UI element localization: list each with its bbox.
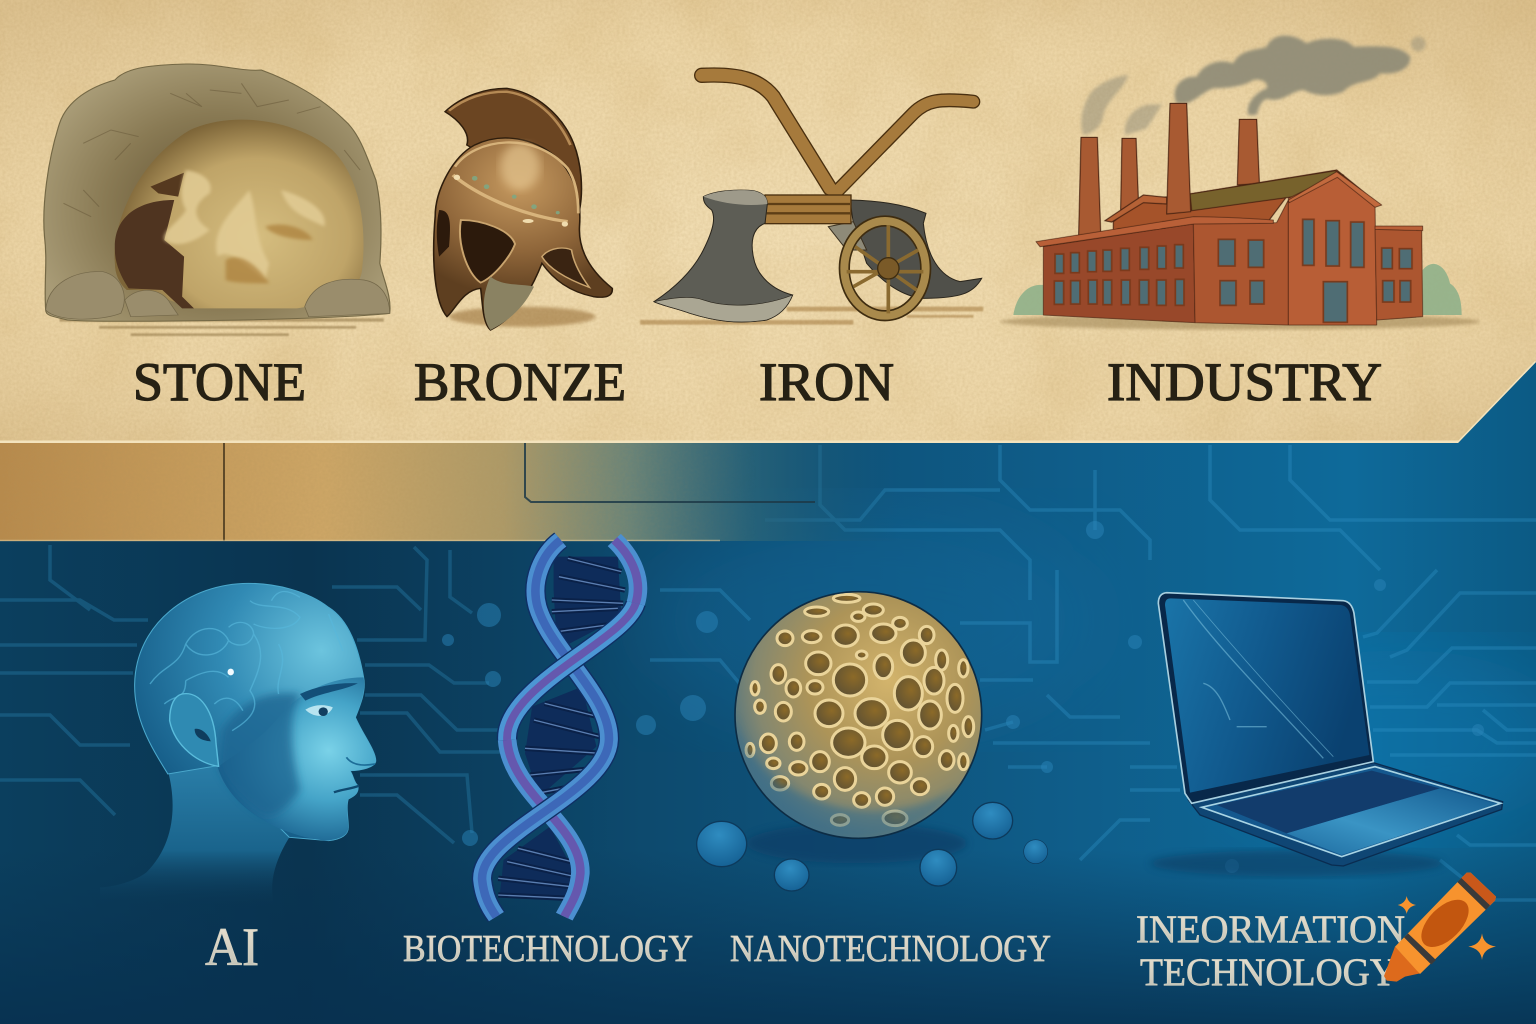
darker circuit traces behind the head [0, 545, 504, 843]
icon: stone cave [44, 64, 390, 336]
base pair rungs [498, 558, 625, 898]
keyboard [1217, 771, 1440, 833]
cranium [135, 583, 376, 841]
label: IRON: IRON [759, 352, 894, 412]
label: INDUSTRY: INDUSTRY [1107, 352, 1382, 412]
laptop base [1188, 763, 1503, 866]
label: AI: AI [205, 917, 259, 977]
label: information technology [1136, 908, 1405, 994]
neural vein pattern [150, 591, 343, 731]
tall chimney [1167, 103, 1191, 214]
face [218, 677, 376, 841]
icon: laptop [1150, 593, 1503, 877]
shaded temple and cheek [218, 693, 300, 816]
shaded lower rim [737, 728, 956, 838]
transition band: parchment fading to blue [0, 443, 900, 541]
building walls [1036, 172, 1423, 325]
circuit nodes [442, 521, 1484, 873]
ground and trees [1000, 264, 1480, 330]
icon: crayon badge with sparkles [1384, 873, 1496, 982]
windows [1054, 219, 1412, 322]
label: information technology: INEORMATION [1136, 908, 1405, 951]
label: BRONZE: BRONZE [414, 352, 626, 412]
second strand [482, 540, 609, 917]
icon: bronze helmet [434, 88, 612, 330]
circuit traces [650, 445, 1536, 900]
blue technology background [0, 350, 1536, 1024]
ear [170, 694, 219, 766]
brow, eye, mouth [300, 683, 375, 792]
chimneys [1079, 119, 1259, 235]
label: BIOTECHNOLOGY: BIOTECHNOLOGY [403, 928, 693, 970]
icon: brick factory [1000, 36, 1480, 330]
nanoparticles [697, 802, 1048, 891]
screen [1158, 593, 1373, 803]
icon: AI head profile [100, 583, 376, 907]
smoke plumes [1081, 36, 1426, 135]
icon: plow with axe blade and wheel [640, 75, 983, 325]
neck and shoulders [100, 764, 289, 907]
label: STONE: STONE [133, 352, 306, 412]
palm rest [1287, 788, 1497, 855]
front crossing [507, 603, 636, 740]
rear strand [507, 540, 638, 917]
surface cells [746, 594, 974, 826]
dark interior of the helix [500, 557, 621, 900]
main roof and rear hall [1105, 170, 1380, 233]
icon: nanotechnology sphere [697, 592, 1048, 891]
label: NANOTECHNOLOGY: NANOTECHNOLOGY [730, 928, 1051, 970]
parchment panel [0, 0, 1536, 443]
label: information technology: TECHNOLOGY [1140, 951, 1397, 994]
icon: DNA helix [482, 540, 638, 917]
